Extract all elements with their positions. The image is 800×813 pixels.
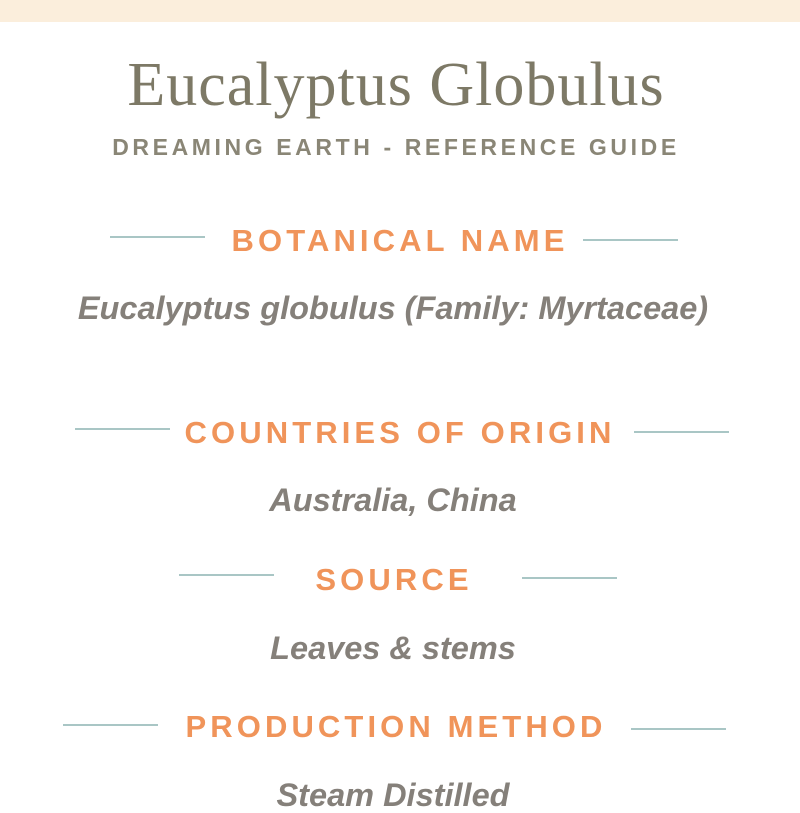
- heading: source: SOURCE: [315, 562, 473, 597]
- title: Eucalyptus Globulus: [127, 51, 665, 119]
- text: countries: Australia, China: [269, 482, 517, 518]
- section: source: [179, 562, 617, 666]
- section: production method: [63, 709, 726, 813]
- subtitle: DREAMING EARTH - REFERENCE GUIDE: [112, 134, 680, 160]
- text: source: Leaves & stems: [270, 630, 516, 666]
- section: countries of origin: [75, 415, 729, 518]
- text: production method: Steam Distilled: [276, 777, 510, 813]
- heading: production method: PRODUCTION METHOD: [185, 709, 607, 744]
- text: botanical name: Eucalyptus globulus (Family: Myrtaceae): [78, 290, 708, 326]
- heading: botanical name: BOTANICAL NAME: [232, 223, 568, 258]
- section: botanical name: [78, 223, 708, 326]
- top band: [0, 0, 800, 22]
- heading: countries: COUNTRIES OF ORIGIN: [185, 415, 615, 450]
